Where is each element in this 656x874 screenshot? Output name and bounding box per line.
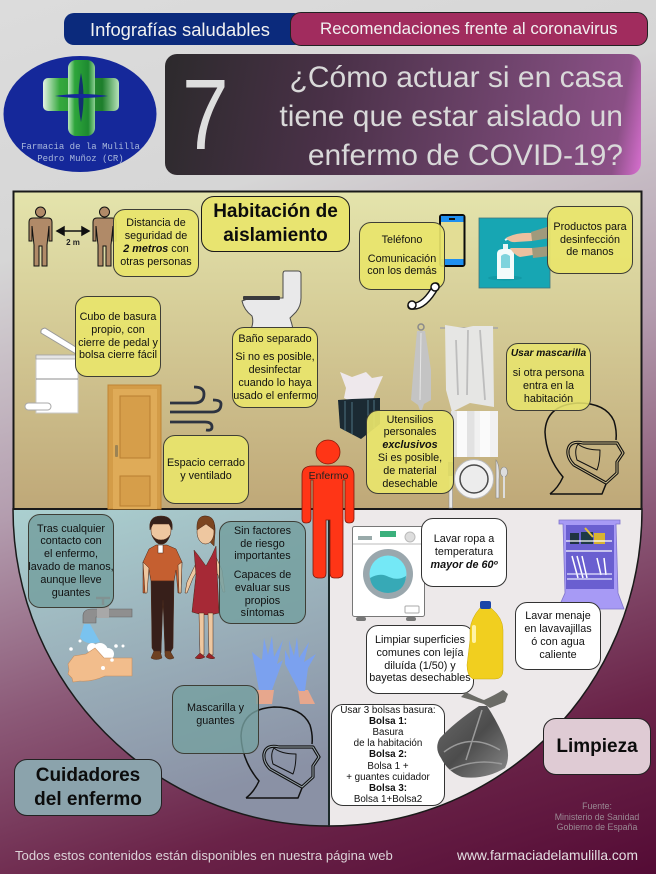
card: mask and gloves: guantes xyxy=(196,714,235,726)
card: hand washing: guantes xyxy=(52,587,90,599)
heading: Habitación de aislamiento: Habitación de xyxy=(213,201,338,222)
card: three bags: Bolsa 1 + xyxy=(367,761,409,772)
card: phone xyxy=(359,222,445,290)
card: wash clothes: temperatura xyxy=(435,546,493,558)
card: hand washing: lavado de manos, xyxy=(28,561,114,573)
card: trash bin xyxy=(75,296,161,377)
card: hand disinfection xyxy=(547,206,633,274)
source note: Fuente: xyxy=(582,801,612,811)
card: hand washing xyxy=(28,514,114,608)
card: wash clothes: Lavar ropa a xyxy=(434,533,494,545)
card: mask and gloves: Mascarilla y xyxy=(187,702,244,714)
card: distance: Distancia de xyxy=(126,217,186,229)
pill: Recomendaciones frente al coronavirus: Recomendaciones frente al coronavirus xyxy=(320,19,618,38)
card: no risk factors: de riesgo xyxy=(240,538,285,550)
card: distance xyxy=(113,209,199,277)
card: hand disinfection: desinfección xyxy=(560,234,620,246)
logo: Farmacia de la Mulilla: Pedro Muñoz (CR) xyxy=(37,154,124,164)
card: dishwasher note: en lavavajillas xyxy=(524,623,592,635)
card: dishwasher note: caliente xyxy=(539,649,577,661)
logo: Farmacia de la Mulilla: Farmacia de la Mulilla xyxy=(21,142,141,152)
card: no risk factors: Sin factores xyxy=(234,525,291,537)
card: no risk factors: importantes Capaces de xyxy=(234,550,291,581)
card: clean surfaces: diluída (1/50) y xyxy=(384,660,456,672)
card: personal utensils: de material xyxy=(383,465,437,477)
question heading: enfermo de COVID-19? xyxy=(308,139,623,172)
card: separate bathroom xyxy=(232,327,318,408)
icon: patient figure: Enfermo xyxy=(309,470,348,482)
card: use mask: habitación xyxy=(524,393,573,405)
source note: Ministerio de Sanidad xyxy=(555,812,639,822)
card: hand washing: Tras cualquier xyxy=(37,523,105,535)
card: distance: otras personas xyxy=(120,256,192,268)
card: dishwasher note xyxy=(515,602,601,670)
card: trash bin: bolsa cierre fácil xyxy=(79,349,157,361)
heading: Habitación de aislamiento xyxy=(201,196,350,252)
pill: Infografías saludables: Infografías saludables xyxy=(90,19,270,40)
card: hand washing: contacto con xyxy=(40,535,102,547)
heading: Habitación de aislamiento: aislamiento xyxy=(223,225,328,246)
card: three bags: de la habitación xyxy=(354,738,422,749)
title panel xyxy=(165,54,641,175)
number 7: 7 xyxy=(182,59,229,171)
source note xyxy=(555,801,639,832)
card: three bags: Bolsa 1+Bolsa2 xyxy=(354,794,422,805)
card: three bags: Bolsa 2: xyxy=(369,749,407,760)
card: three bags: Basura xyxy=(372,727,404,738)
card: no risk factors: evaluar sus xyxy=(235,582,290,594)
card: separate bathroom: Baño separado Si no es posible, xyxy=(235,332,315,363)
card: distance: 2 metros con xyxy=(123,243,189,255)
footer url: www.farmaciadelamulilla.com xyxy=(457,848,638,863)
card: ventilated room: y ventilado xyxy=(180,470,232,482)
question heading xyxy=(279,61,623,172)
heading: Limpieza: Limpieza xyxy=(556,736,638,756)
footer text left: Todos estos contenidos están disponibles en nuestra página web xyxy=(15,848,393,863)
card: ventilated room xyxy=(163,435,249,504)
card: personal utensils xyxy=(366,410,454,494)
card: no risk factors: propios xyxy=(245,595,280,607)
heading: Cuidadores del enfermo xyxy=(14,759,162,816)
card: wash clothes: mayor de 60º xyxy=(431,559,497,571)
card: trash bin: Cubo de basura xyxy=(80,311,156,323)
card: trash bin: cierre de pedal y xyxy=(78,336,158,348)
card: clean surfaces: Limpiar superficies xyxy=(375,634,465,646)
card: use mask: si otra persona xyxy=(513,367,584,379)
card: clean surfaces xyxy=(366,625,474,694)
icon: two people 2 m apart: 2 m xyxy=(66,238,80,247)
card: use mask: Usar mascarilla xyxy=(511,348,586,359)
heading: Cuidadores del enfermo: del enfermo xyxy=(34,788,142,810)
card: distance: seguridad de xyxy=(125,230,187,242)
card: separate bathroom: usado el enfermo xyxy=(233,390,317,402)
card: clean surfaces: bayetas desechables xyxy=(369,672,471,684)
card: hand washing: aunque lleve xyxy=(40,574,102,586)
card: personal utensils: exclusivos xyxy=(382,439,438,451)
card: personal utensils: Si es posible, xyxy=(378,452,442,464)
card: hand washing: el enfermo, xyxy=(44,548,98,560)
card: clean surfaces: comunes con lejía xyxy=(376,647,464,659)
card: personal utensils: personales xyxy=(384,426,436,438)
card: personal utensils: Utensilios xyxy=(387,414,433,426)
card: trash bin: propio, con xyxy=(91,324,145,336)
card: dishwasher note: Lavar menaje xyxy=(525,610,591,622)
card: three bags: Bolsa 3: xyxy=(369,783,407,794)
card: no risk factors xyxy=(219,521,306,624)
card: separate bathroom: desinfectar xyxy=(249,364,301,376)
heading: Limpieza xyxy=(543,718,651,775)
question heading: ¿Cómo actuar si en casa xyxy=(290,61,623,94)
pill: Recomendaciones frente al coronavirus xyxy=(290,12,648,46)
card: three bags: Bolsa 1: xyxy=(369,716,407,727)
card: three bags: Usar 3 bolsas basura: xyxy=(340,705,436,716)
card: phone: con los demás xyxy=(367,265,437,277)
logo: Farmacia de la Mulilla xyxy=(4,56,156,172)
card: three bags: + guantes cuidador xyxy=(346,772,430,783)
source note: Gobierno de España xyxy=(557,822,637,832)
pill: Infografías saludables xyxy=(64,13,304,45)
card: three bags xyxy=(331,704,445,806)
card: phone: Teléfono Comunicación xyxy=(368,234,436,265)
card: hand disinfection: de manos xyxy=(566,246,614,258)
card: wash clothes xyxy=(421,518,507,587)
card: ventilated room: Espacio cerrado xyxy=(167,457,245,469)
card: dishwasher note: ó con agua xyxy=(531,636,585,648)
card: use mask xyxy=(506,343,591,411)
card: hand disinfection: Productos para xyxy=(553,221,627,233)
card: use mask: entra en la xyxy=(523,380,574,392)
question heading: tiene que estar aislado un xyxy=(279,100,623,133)
card: separate bathroom: cuando lo haya xyxy=(238,377,312,389)
card: mask and gloves xyxy=(172,685,259,754)
card: personal utensils: desechable xyxy=(382,478,438,490)
heading: Cuidadores del enfermo: Cuidadores xyxy=(36,764,140,786)
card: no risk factors: síntomas xyxy=(241,607,284,619)
